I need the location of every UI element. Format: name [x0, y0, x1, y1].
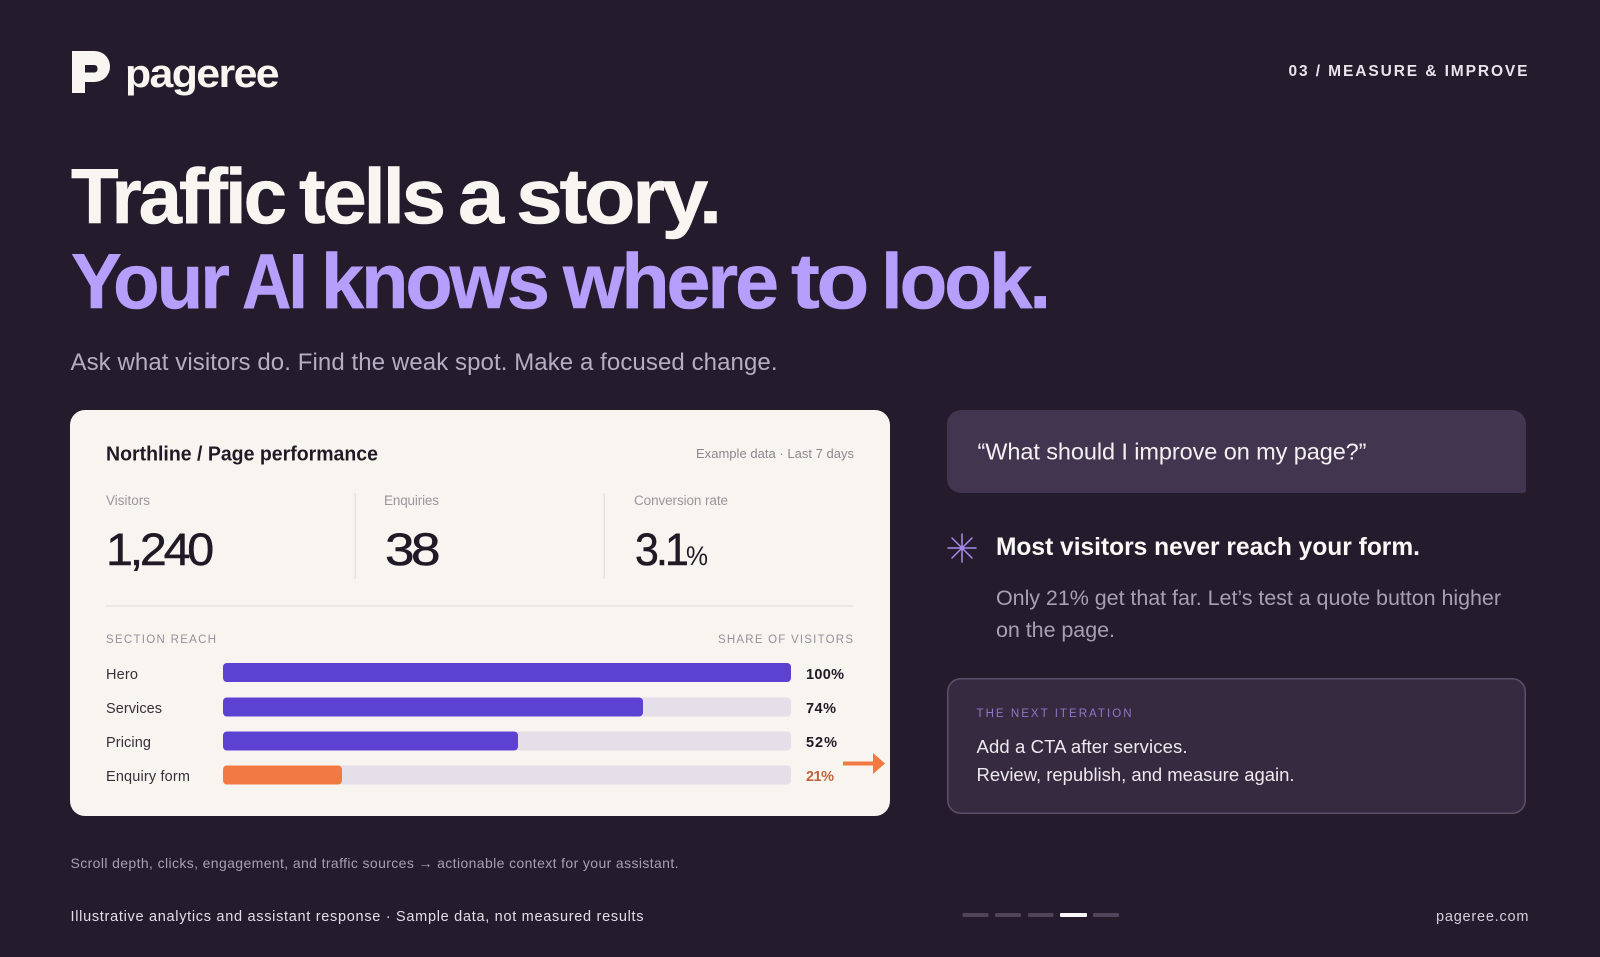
panel: the next iteration [948, 679, 1525, 813]
metric: visitors: Visitors [106, 493, 150, 508]
bar: pricing [106, 732, 837, 751]
bar: hero: 100% [806, 667, 844, 683]
title line 1: tells [299, 152, 444, 240]
bar chart: section reach [106, 663, 844, 785]
bar: services: 74% [806, 701, 836, 717]
panel: assistant response [948, 533, 1501, 642]
title line 2: knows [321, 237, 548, 325]
footer disclaimer: Illustrative analytics and assistant response · Sample data, not measured results [70, 909, 644, 925]
metric: enquiries [384, 493, 439, 575]
chart header: section reach: SECTION REACH [106, 634, 216, 646]
title line 2: where [562, 237, 777, 325]
title line 1 [71, 152, 719, 240]
arrow: points to enquiry form [843, 753, 885, 774]
bar: services: Services [106, 701, 162, 717]
wordmark: pageree [125, 52, 278, 96]
caption: Scroll depth, clicks, engagement, and traffic sources → actionable context for your assistant. [70, 855, 678, 871]
panel: page performance card [70, 410, 890, 816]
title line 2: AI [242, 237, 305, 325]
response body: Only 21% get that far. Let’s test a quote button higher [996, 586, 1501, 610]
card date range: Example data · Last 7 days [696, 446, 854, 461]
footer url: pageree.com [1436, 909, 1528, 925]
metric: visitors: 1,240 [106, 524, 213, 575]
panel: user question bubble: “What should I improve on my page?” [978, 438, 1366, 464]
response body [996, 586, 1501, 642]
metric: enquiries: Enquiries [384, 493, 439, 508]
metric: conversion rate: % [686, 541, 708, 571]
metric: conversion rate [634, 493, 728, 575]
title line 2 [71, 237, 1048, 325]
card title: Northline / Page performance [106, 444, 378, 466]
bar: pricing: Pricing [106, 735, 151, 751]
panel: the next iteration: Review, republish, and measure again. [976, 764, 1294, 785]
bar: enquiry form: Enquiry form [106, 769, 190, 785]
title line 1: a [458, 152, 505, 240]
chart header: share of visitors: SHARE OF VISITORS [718, 634, 853, 646]
bar: enquiry form: 21% [806, 769, 834, 785]
pagination dashes [962, 913, 1119, 917]
panel: user question bubble [947, 410, 1526, 493]
panel: the next iteration: THE NEXT ITERATION [976, 708, 1132, 720]
bar: enquiry form [106, 766, 834, 785]
icon: P mark [72, 51, 110, 93]
title line 1: Traffic [71, 152, 286, 240]
subtitle: Ask what visitors do. Find the weak spot. Make a focused change. [70, 349, 778, 376]
section label: 03 / MEASURE & IMPROVE [1288, 63, 1528, 80]
bar: hero [106, 663, 844, 683]
response body: on the page. [996, 618, 1115, 642]
title line 2: to [791, 237, 866, 325]
bar: pricing: 52% [806, 735, 837, 751]
panel: the next iteration: Add a CTA after services. [976, 736, 1188, 757]
metric: conversion rate: Conversion rate [634, 493, 728, 508]
response heading: Most visitors never reach your form. [996, 533, 1420, 561]
title [71, 152, 1048, 325]
bar: hero: Hero [106, 667, 138, 683]
title line 1: story. [516, 152, 719, 240]
title line 2: Your [71, 237, 230, 325]
title line 2: look. [881, 237, 1048, 325]
icon: sparkle asterisk [948, 534, 976, 562]
metric: visitors [106, 493, 213, 575]
logo: pageree [72, 51, 278, 96]
metric: enquiries: 38 [385, 524, 439, 575]
bar: services [106, 698, 836, 717]
metric: conversion rate: 3.1 [635, 524, 687, 575]
